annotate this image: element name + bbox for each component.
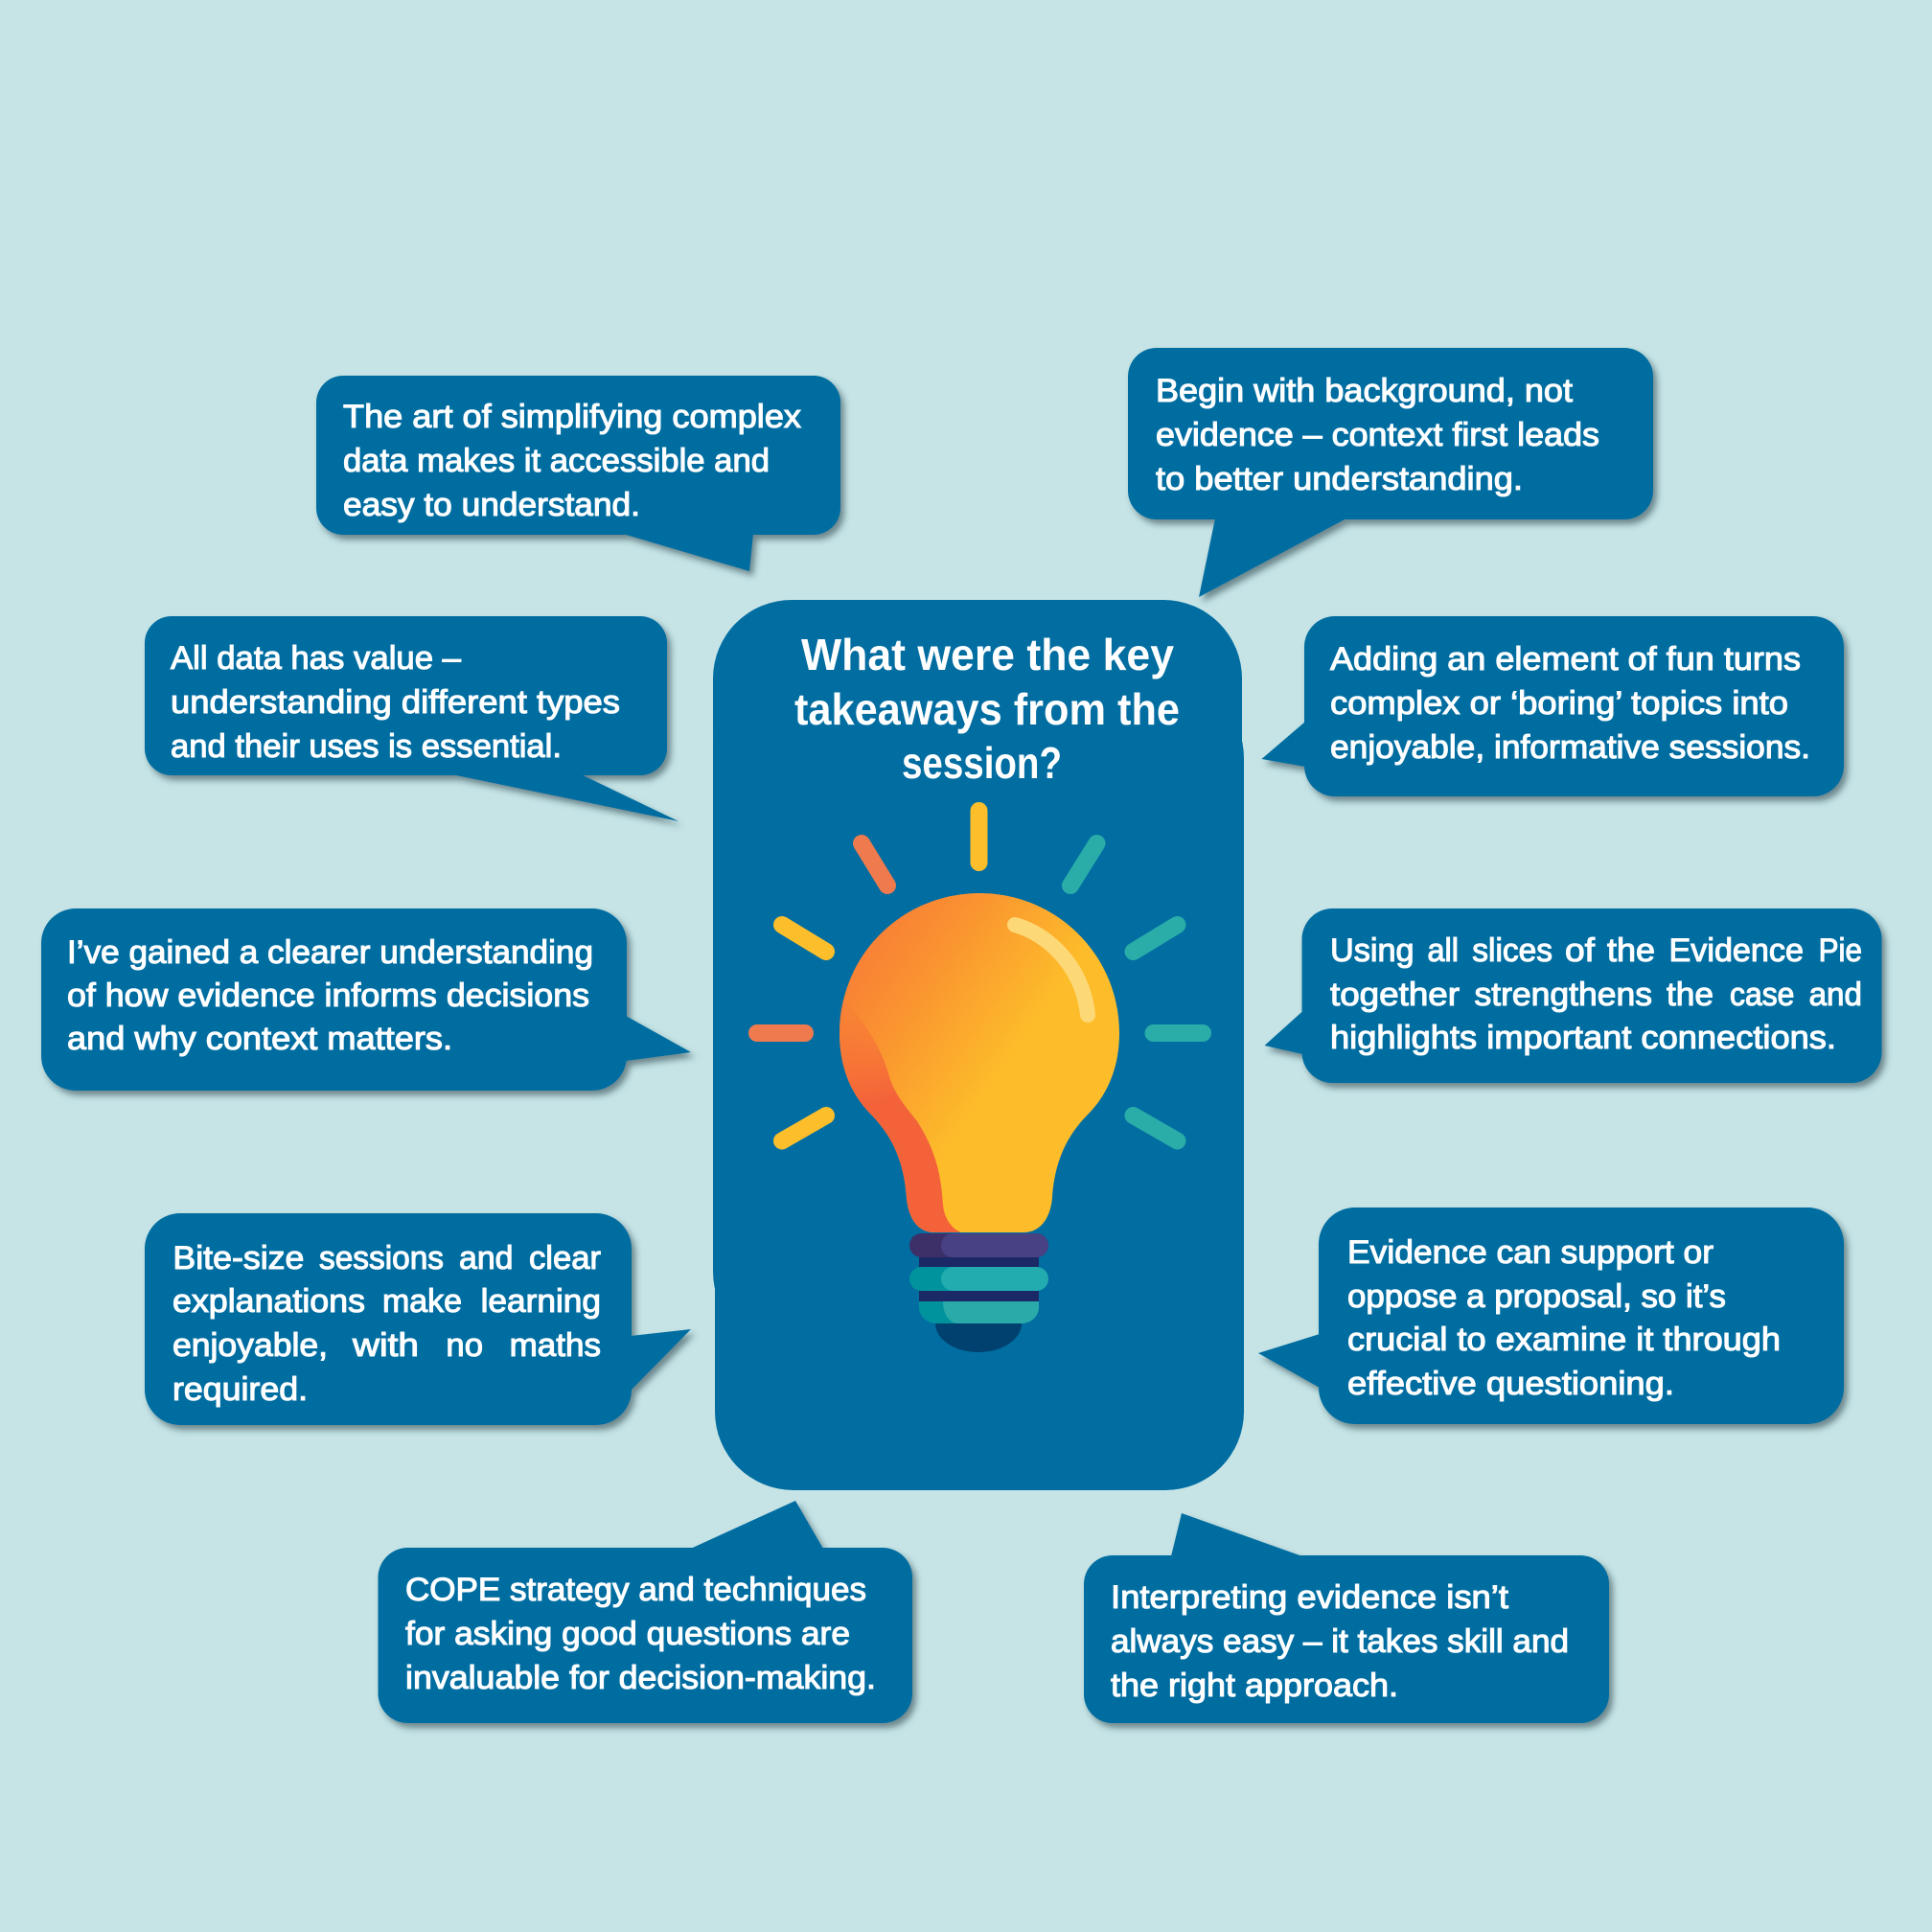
text: for asking good questions are (405, 1616, 850, 1652)
speech bubble: evidence pie (1265, 908, 1882, 1083)
text: clear (529, 1240, 601, 1276)
text: required. (172, 1371, 308, 1408)
text: highlights important connections. (1330, 1020, 1836, 1056)
text: of (1565, 932, 1595, 969)
text: understanding different types (171, 684, 620, 721)
text: make (382, 1283, 462, 1320)
text: learning (481, 1283, 601, 1320)
text: and (459, 1240, 514, 1276)
text: case (1730, 977, 1794, 1013)
text: the right approach. (1111, 1668, 1398, 1704)
text: effective questioning. (1347, 1366, 1674, 1402)
text: Bite-size (172, 1240, 304, 1276)
icon: light bulb (757, 811, 1203, 1352)
title: session? (902, 738, 1062, 788)
text: slices (1472, 932, 1552, 969)
speech bubble: all data has value (145, 616, 678, 821)
text (1111, 1579, 1569, 1704)
text (405, 1572, 876, 1696)
text (1156, 373, 1599, 497)
rays (757, 811, 1203, 1140)
text: all (1428, 932, 1459, 969)
text (171, 640, 620, 765)
title (794, 630, 1180, 788)
bulb base (909, 1233, 1048, 1352)
text: sessions (319, 1240, 444, 1276)
text: maths (510, 1327, 601, 1364)
text: strengthens (1474, 977, 1652, 1013)
text: no (446, 1327, 483, 1364)
text: evidence – context first leads (1156, 417, 1599, 453)
text: explanations (172, 1283, 365, 1320)
text (1330, 641, 1810, 766)
text: always easy – it takes skill and (1111, 1623, 1569, 1660)
text: with (352, 1327, 419, 1364)
text: I’ve gained a clearer understanding (67, 934, 593, 971)
text: and their uses is essential. (171, 728, 562, 765)
speech bubble: clearer understanding (41, 908, 691, 1091)
speech bubble: bite-size sessions (145, 1213, 691, 1425)
speech bubble: support or oppose (1258, 1208, 1844, 1424)
speech bubble: simplifying data (316, 376, 840, 571)
text: COPE strategy and techniques (405, 1572, 866, 1608)
bulb glass (840, 893, 1119, 1232)
text: and (1809, 977, 1862, 1013)
speech bubble: interpreting evidence (1084, 1513, 1609, 1723)
text: the (1607, 932, 1655, 969)
speech bubble: background first (1128, 348, 1653, 597)
text: The art of simplifying complex (343, 399, 801, 435)
text: of how evidence informs decisions (67, 978, 589, 1014)
text: data makes it accessible and (343, 443, 770, 479)
text: together (1330, 977, 1460, 1013)
speech bubble: COPE strategy (378, 1501, 912, 1723)
text: easy to understand. (343, 487, 640, 523)
text: invaluable for decision-making. (405, 1660, 876, 1696)
text: Pie (1819, 932, 1862, 969)
title: takeaways from the (794, 684, 1180, 734)
title: What were the key (801, 630, 1174, 679)
text: and why context matters. (67, 1021, 452, 1057)
text: enjoyable, (172, 1327, 328, 1364)
text: Adding an element of fun turns (1330, 641, 1801, 678)
text (172, 1240, 601, 1408)
text (343, 399, 801, 523)
text: Interpreting evidence isn’t (1111, 1579, 1508, 1616)
bulb highlight (1015, 925, 1088, 1015)
bulb shaded side (840, 997, 961, 1232)
text: the (1667, 977, 1714, 1013)
text: oppose a proposal, so it’s (1347, 1278, 1726, 1315)
panel: central question (713, 600, 1244, 1490)
text: All data has value – (171, 640, 462, 677)
text: enjoyable, informative sessions. (1330, 729, 1810, 766)
text: Using (1330, 932, 1414, 969)
text: complex or ‘boring’ topics into (1330, 685, 1788, 722)
text: Begin with background, not (1156, 373, 1573, 409)
text (1330, 932, 1862, 1056)
speech bubble: element of fun (1261, 616, 1844, 796)
text: Evidence can support or (1347, 1234, 1714, 1271)
text: Evidence (1669, 932, 1804, 969)
text (67, 934, 593, 1057)
text (1347, 1234, 1781, 1402)
text: crucial to examine it through (1347, 1322, 1781, 1358)
text: to better understanding. (1156, 461, 1523, 497)
